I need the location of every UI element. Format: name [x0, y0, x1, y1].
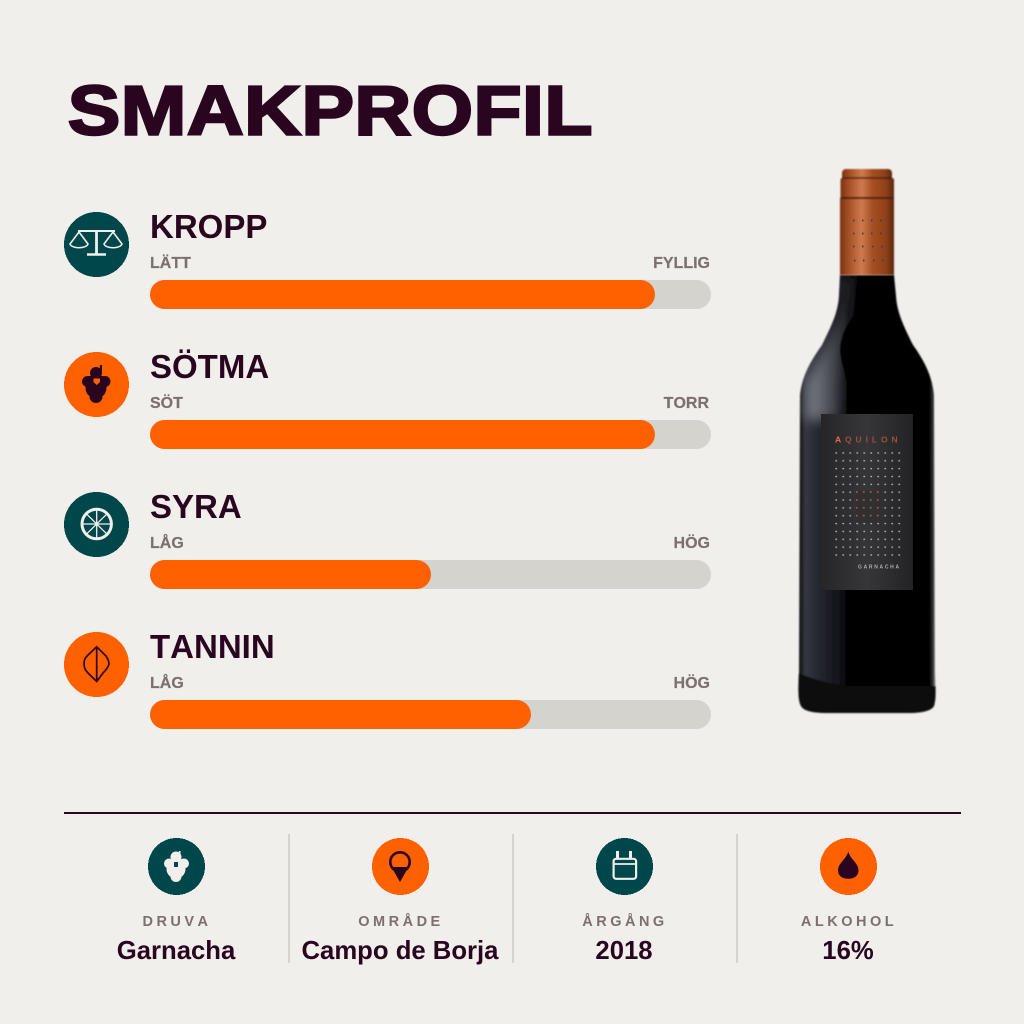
heading: sötma: SÖTMA: [150, 348, 269, 385]
scale label: low: LÅG: [150, 675, 184, 692]
wine label: [821, 414, 913, 590]
label: alkohol: ALKOHOL: [801, 914, 897, 930]
separator: [288, 834, 290, 963]
heading: tannin: TANNIN: [150, 628, 275, 665]
heading: kropp: KROPP: [150, 208, 267, 245]
icon: white grapes: [148, 838, 205, 895]
label: druva: DRUVA: [142, 914, 212, 930]
scale label: high: HÖG: [674, 675, 710, 692]
label: årgång: ÅRGÅNG: [582, 914, 668, 930]
panel: årgång: [582, 838, 668, 965]
icon: citrus wheel: [64, 492, 129, 557]
separator: [736, 834, 738, 963]
capsule: [840, 169, 894, 275]
value: område: Campo de Borja: [302, 937, 498, 965]
icon: calendar: [596, 838, 653, 895]
panel: druva: [117, 838, 236, 965]
scale label: high: HÖG: [674, 535, 710, 552]
bar: kropp: [150, 280, 711, 309]
title: SMAKPROFIL: [68, 71, 593, 149]
separator: [512, 834, 514, 963]
bar: syra: [150, 560, 711, 589]
panel: sötma row: [64, 348, 711, 449]
value: årgång: 2018: [595, 937, 653, 965]
icon: drop: [820, 838, 877, 895]
panel: alkohol: [801, 838, 897, 965]
icon: leaf: [64, 632, 129, 697]
scale label: low: LÅG: [150, 535, 184, 552]
panel: tannin row: [64, 628, 711, 729]
scale label: low: LÄTT: [150, 255, 191, 272]
panel: syra row: [64, 488, 711, 589]
bar: tannin: [150, 700, 711, 729]
value: alkohol: 16%: [822, 937, 874, 965]
panel: område: [302, 838, 499, 965]
label: område: OMRÅDE: [358, 914, 444, 930]
wine bottle: [797, 168, 937, 714]
scale label: high: FYLLIG: [653, 255, 710, 272]
icon: grapes: [64, 352, 129, 417]
divider line: [64, 812, 961, 814]
icon: scales: [64, 212, 129, 277]
wine label: AQUILON: [835, 434, 902, 444]
heading: syra: SYRA: [150, 488, 242, 525]
value: druva: Garnacha: [117, 937, 235, 965]
panel: kropp row: [64, 208, 711, 309]
bar: sötma: [150, 420, 711, 449]
scale label: low: SÖT: [150, 395, 183, 412]
scale label: high: TORR: [664, 395, 709, 412]
bottle glass: [795, 270, 940, 720]
icon: map pin: [372, 838, 429, 895]
wine label: GARNACHA: [858, 564, 901, 570]
